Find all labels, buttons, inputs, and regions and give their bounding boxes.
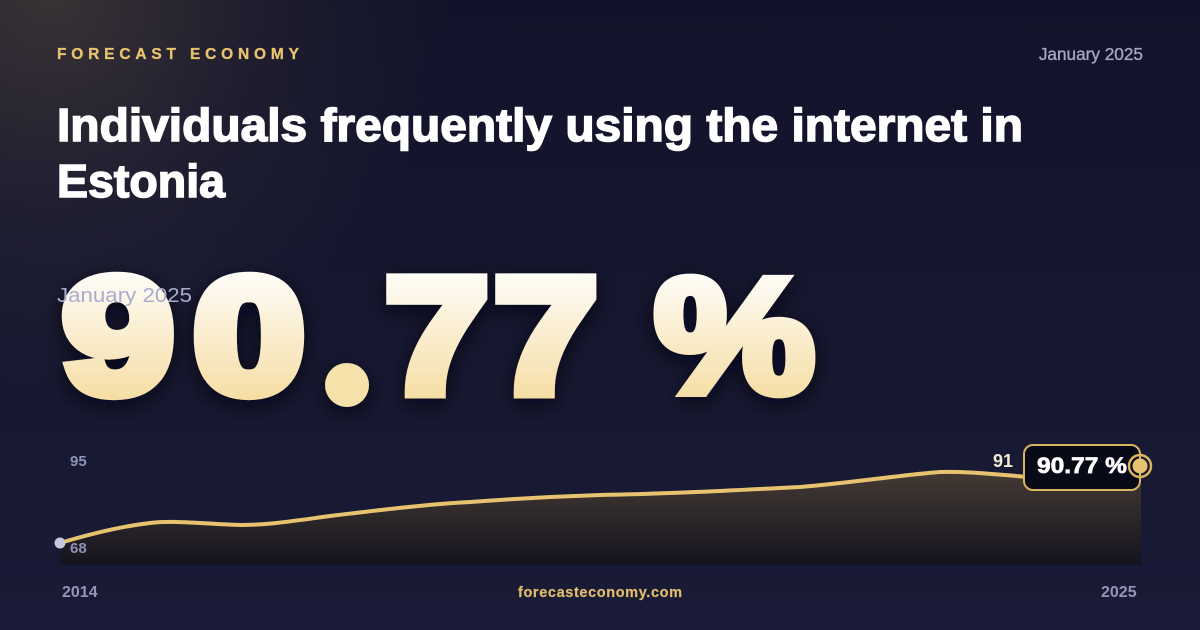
overlapping date label: January 2025: [57, 284, 192, 307]
chart: [54, 445, 1151, 565]
title: [57, 99, 1023, 207]
big value: %: [654, 246, 815, 427]
end year: 2025: [1101, 584, 1137, 601]
start point: [54, 538, 66, 548]
website: forecasteconomy.com: [518, 585, 682, 601]
date top right: January 2025: [1039, 44, 1143, 64]
big value decimal point: [325, 363, 369, 407]
big value: 9: [63, 244, 173, 427]
big value: [63, 244, 815, 427]
value callout: [1024, 445, 1140, 490]
title: Individuals frequently using the internet in: [57, 99, 1023, 151]
value callout: 90.77 %: [1037, 453, 1127, 478]
end marker: [1129, 455, 1151, 477]
axis min label: 68: [70, 540, 87, 557]
last tick label: 91: [993, 451, 1013, 471]
chart line: [60, 472, 1030, 543]
brand label: FORECAST ECONOMY: [57, 46, 300, 63]
title: Estonia: [57, 155, 225, 207]
start year: 2014: [62, 584, 98, 601]
big value: 7: [386, 245, 488, 427]
big value: 0: [194, 244, 304, 427]
axis max label: 95: [70, 453, 87, 470]
chart area: [60, 472, 1141, 565]
big value: 7: [495, 245, 597, 427]
